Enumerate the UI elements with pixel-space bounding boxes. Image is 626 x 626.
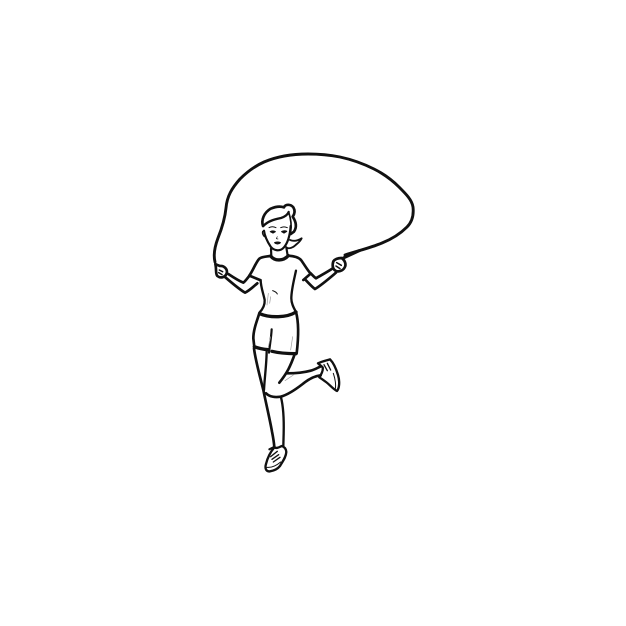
head and hair <box>262 205 302 250</box>
bent leg <box>266 353 321 397</box>
woman legs and shoes <box>254 348 339 471</box>
t-shirt and torso <box>249 247 311 313</box>
woman upper body <box>215 205 359 354</box>
right arm and rope handle <box>305 251 359 289</box>
standing shoe <box>265 446 286 471</box>
raised shoe <box>318 359 339 391</box>
shorts <box>253 312 298 354</box>
left arm and rope handle <box>215 264 257 293</box>
standing leg <box>254 348 284 447</box>
jump rope <box>214 154 413 262</box>
